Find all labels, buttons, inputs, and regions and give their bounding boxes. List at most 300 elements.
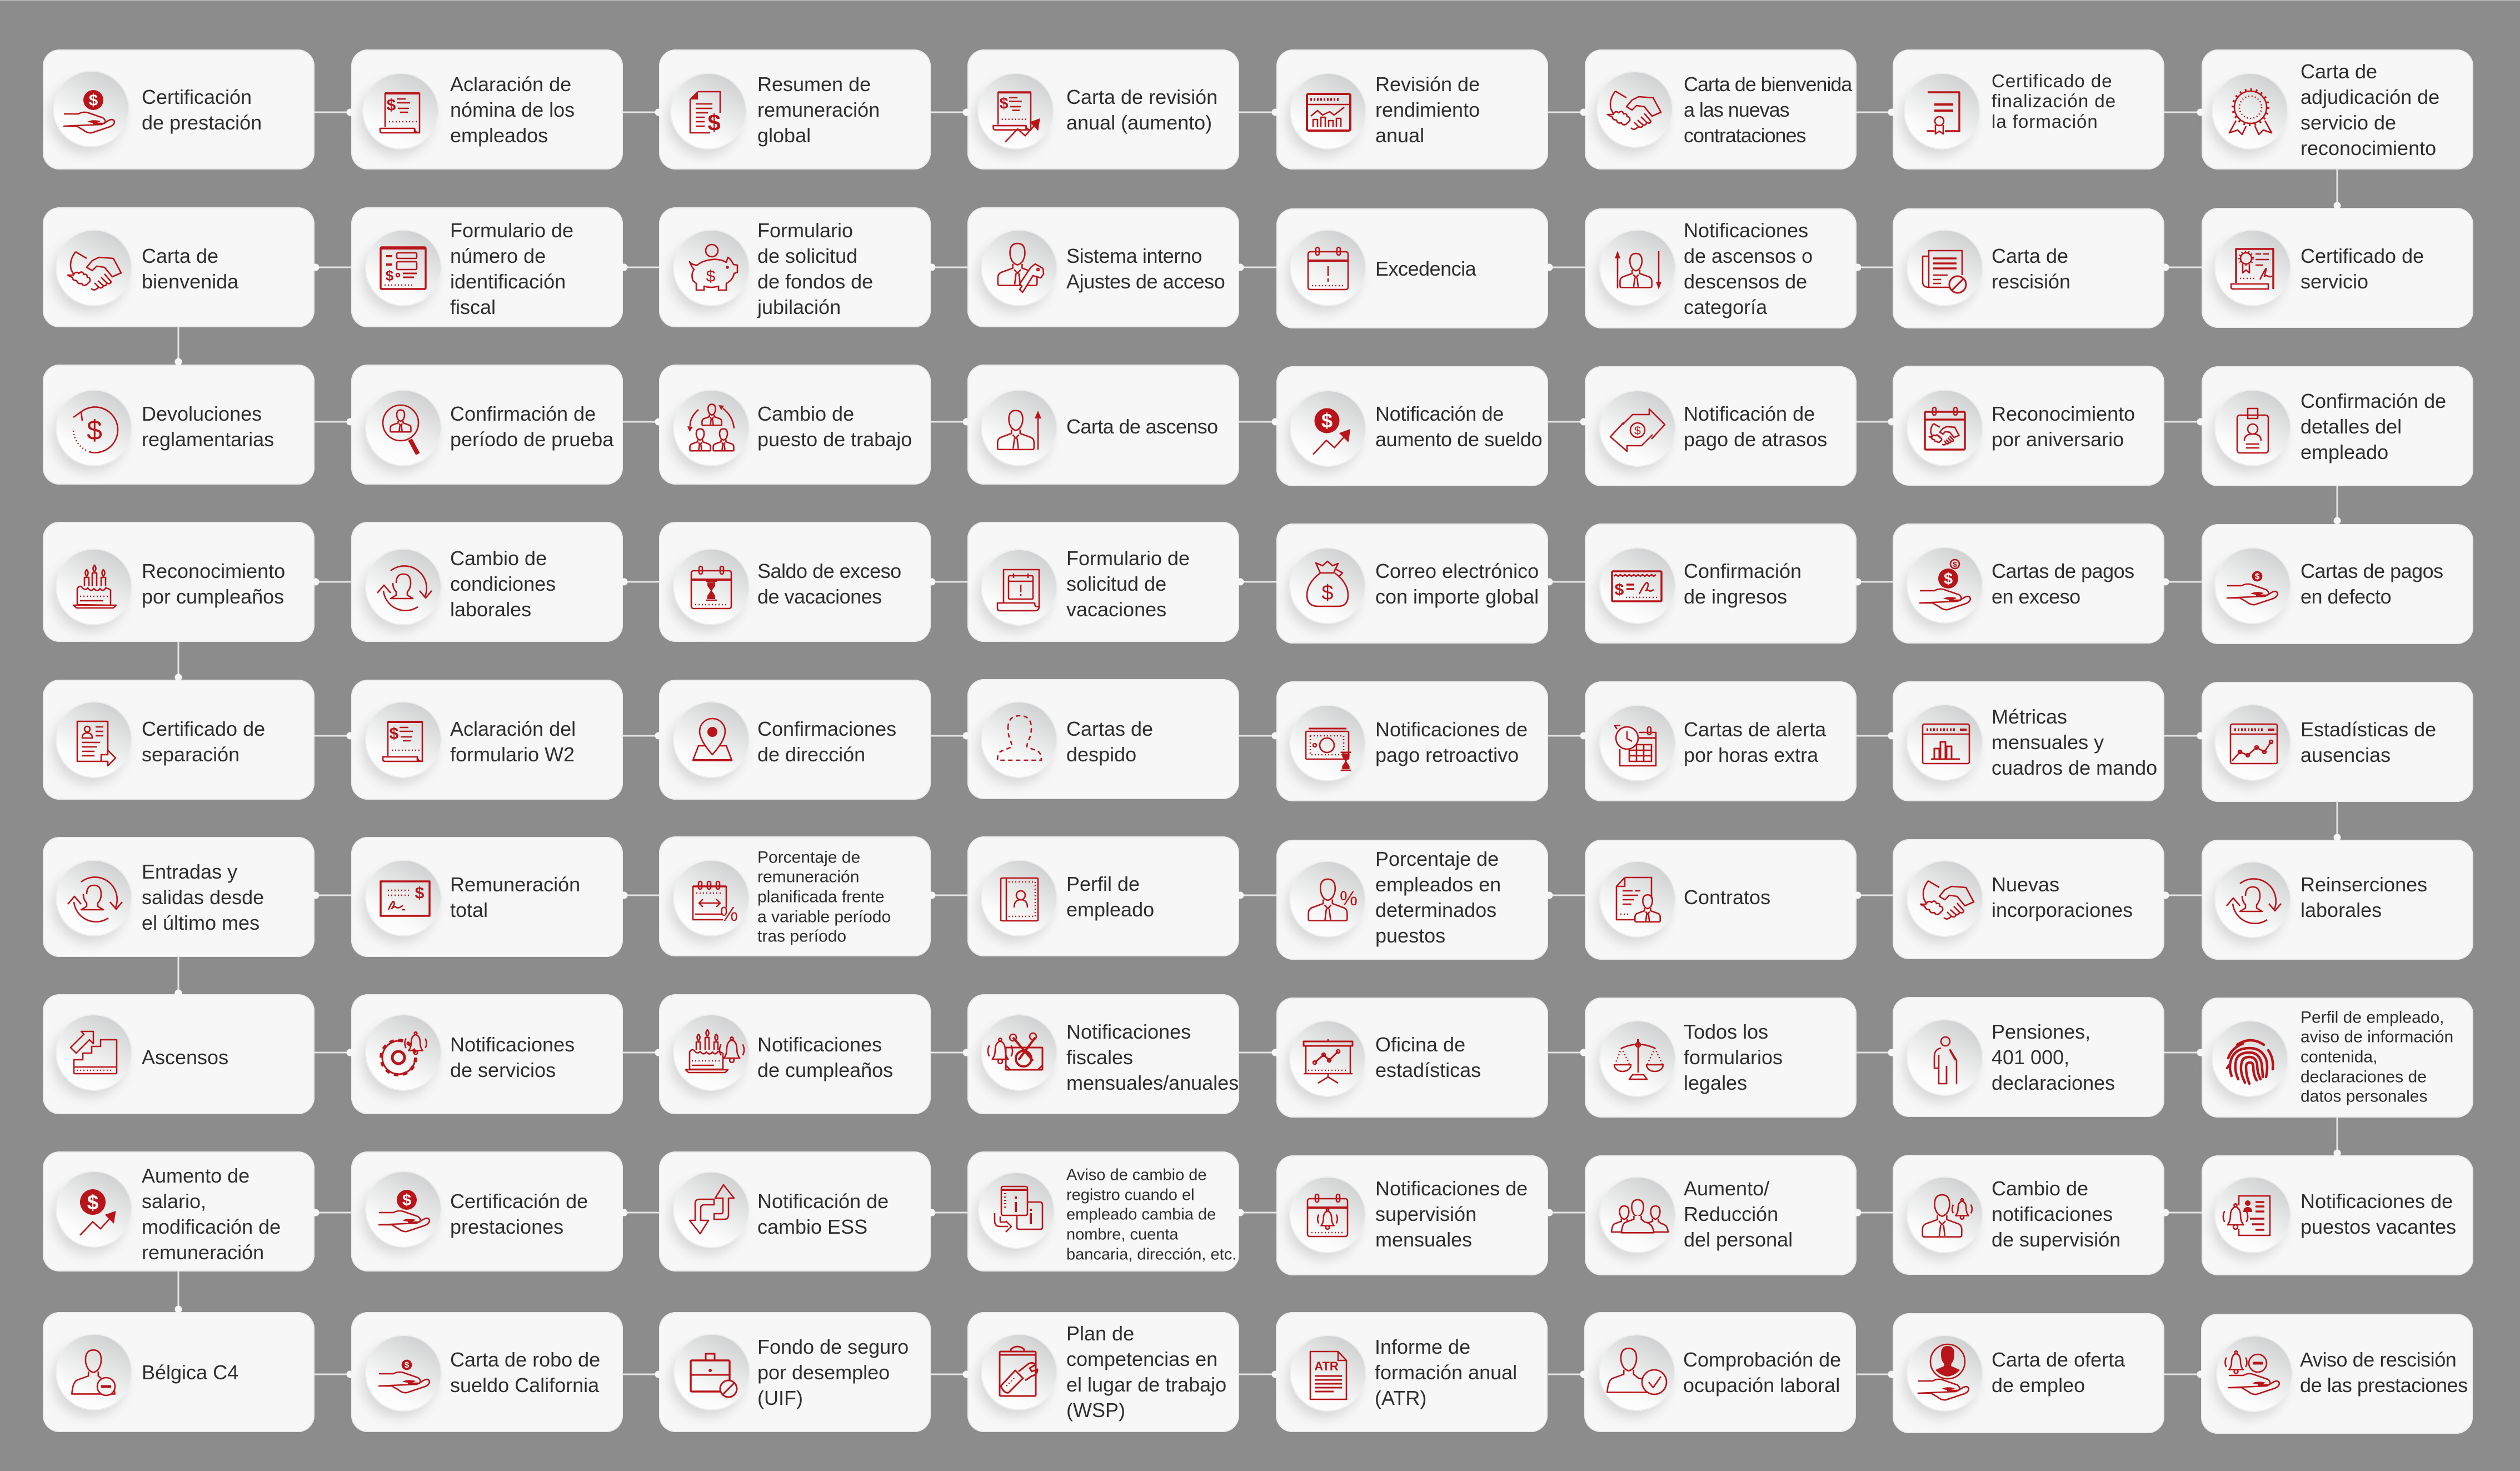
label: Reinserciones — [2301, 873, 2427, 896]
card: Cambio de condiciones laborales — [351, 522, 623, 642]
icon: ATR report: ATR — [1314, 1359, 1339, 1373]
label: Perfil de empleado, — [2301, 1008, 2444, 1026]
icon: calendar with percent — [674, 861, 748, 935]
card: Notificaciones de cumpleaños — [659, 994, 931, 1114]
label: detalles del — [2301, 415, 2402, 438]
icon: ID badge — [2215, 391, 2290, 465]
label: Estadísticas de — [2301, 718, 2436, 741]
label — [2301, 1008, 2453, 1107]
label: Reconocimiento — [142, 560, 285, 582]
label: Certificado de — [142, 717, 265, 740]
card: Carta de oferta de empleo — [1893, 1313, 2164, 1433]
card: Cartas de pagos en exceso — [1893, 523, 2164, 644]
label: Cartas de alerta — [1684, 718, 1826, 741]
label — [1066, 1019, 1239, 1096]
label: Formulario — [757, 219, 853, 242]
label: Nuevas — [1992, 873, 2059, 896]
label — [450, 219, 573, 318]
card: Resumen de remuneración — [659, 49, 931, 169]
label — [142, 559, 285, 610]
card: Formulario de solicitud de fondos — [659, 207, 931, 327]
label: ausencias — [2301, 744, 2391, 766]
label — [1992, 872, 2133, 923]
label — [450, 716, 576, 767]
card: Porcentaje de empleados — [1276, 840, 1548, 960]
label — [1375, 559, 1539, 610]
card: Notificación de cambio ESS — [659, 1151, 931, 1271]
label: reconocimiento — [2301, 137, 2436, 159]
label — [1992, 71, 2116, 132]
label: Ajustes de acceso — [1066, 270, 1225, 293]
label: supervisión — [1375, 1203, 1476, 1225]
icon: circular arrow with dollar — [57, 391, 131, 465]
card: Carta de ascenso — [967, 365, 1239, 485]
card: Bélgica C4 — [43, 1312, 315, 1432]
icon: hand with coins: $ — [1953, 560, 1957, 569]
card: Revisión de rendimiento anual — [1276, 49, 1548, 169]
label — [450, 546, 556, 622]
label: Perfil de — [1066, 872, 1140, 895]
label — [1683, 1347, 1841, 1398]
icon: banknote with hourglass — [1290, 706, 1365, 780]
label: fiscales — [1066, 1046, 1133, 1069]
card: Plan de competencias — [967, 1312, 1239, 1432]
label: Certificación — [142, 86, 252, 108]
icon: scales of justice — [1600, 1021, 1675, 1096]
icon: three people in cycle — [674, 391, 748, 465]
label: Carta de robo de — [450, 1348, 600, 1371]
label — [1992, 1176, 2120, 1253]
icon: hand with person in circle — [1908, 1336, 1982, 1410]
label — [142, 86, 262, 134]
label: ocupación laboral — [1683, 1374, 1840, 1397]
icon: certificate — [1905, 74, 1979, 148]
label: (ATR) — [1375, 1387, 1426, 1409]
icon: map pin — [674, 702, 748, 777]
label — [1375, 1176, 1528, 1253]
label: contrataciones — [1684, 124, 1805, 147]
label: Remuneración — [450, 873, 580, 896]
label: Sistema interno — [1066, 245, 1202, 267]
icon: rosette — [2213, 74, 2287, 148]
icon: person with bell — [1908, 1178, 1982, 1252]
icon: calendar with hourglass — [674, 550, 748, 624]
icon: document with exit arrow — [57, 702, 131, 777]
icon: handshake — [57, 231, 131, 305]
label — [450, 1032, 575, 1083]
label: Revisión de — [1375, 73, 1480, 96]
label: tras período — [757, 928, 846, 946]
card: Cartas de alerta por horas extra — [1585, 681, 1857, 801]
label: remuneración — [757, 868, 859, 886]
label: global — [757, 124, 811, 147]
label: salario, — [142, 1190, 206, 1213]
icon: coin with trend — [57, 1172, 131, 1246]
label: Aclaración de — [450, 73, 571, 96]
label: empleados en — [1375, 873, 1501, 896]
label: Cambio de — [1992, 1177, 2088, 1200]
label — [757, 402, 912, 451]
icon: contract with person — [1600, 862, 1675, 936]
icon: person with up and down arrows — [1600, 231, 1675, 305]
label — [1684, 1019, 1783, 1096]
label: laborales — [450, 598, 531, 621]
label: Cartas de pagos — [1992, 560, 2134, 582]
label: estadísticas — [1375, 1059, 1481, 1081]
icon: three people — [1600, 1178, 1675, 1252]
label: puestos — [1375, 924, 1445, 947]
icon: magnifier over person — [366, 391, 441, 465]
label: Entradas y — [142, 860, 237, 883]
label: Notificaciones — [757, 1033, 882, 1056]
label — [1992, 559, 2134, 610]
label: Formulario de — [450, 219, 573, 242]
icon: pay check — [1600, 548, 1675, 623]
icon: person with rotating arrows — [2215, 862, 2290, 937]
label — [1375, 717, 1528, 768]
card: Notificaciones de puestos vacantes — [2202, 1155, 2473, 1275]
label: determinados — [1375, 899, 1496, 921]
label: Contratos — [1684, 886, 1770, 909]
label — [757, 219, 873, 318]
label — [1066, 1321, 1226, 1423]
label: Resumen de — [757, 73, 871, 96]
label: legales — [1684, 1071, 1747, 1094]
label: Aclaración del — [450, 717, 576, 740]
icon: calendar with percent: % — [720, 902, 738, 925]
card: Carta de robo de sueldo California — [351, 1312, 623, 1432]
label: período de prueba — [450, 428, 613, 451]
label: puestos vacantes — [2301, 1215, 2456, 1238]
card: Entradas y salidas — [43, 837, 315, 957]
label — [1066, 871, 1154, 923]
card: Reconocimiento por aniversario — [1893, 366, 2164, 486]
label: Aumento/ — [1684, 1177, 1769, 1200]
label: el último mes — [142, 911, 260, 934]
label — [1684, 1176, 1793, 1253]
card: Notificación de pago de atrasos — [1585, 366, 1857, 486]
card: Confirmación de ingresos — [1585, 523, 1857, 644]
label: remuneración — [142, 1241, 264, 1264]
card: Certificado de finalización — [1893, 49, 2164, 169]
label — [1684, 717, 1826, 768]
label: competencias en — [1066, 1348, 1217, 1370]
label: mensuales y — [1992, 731, 2104, 754]
label: servicio de — [2301, 111, 2396, 134]
label: modificación de — [142, 1215, 281, 1238]
label: rendimiento — [1375, 98, 1480, 121]
label: Cartas de — [1066, 717, 1153, 740]
card: Carta de revisión anual — [967, 49, 1239, 169]
label: Fondo de seguro — [757, 1335, 909, 1358]
label: sueldo California — [450, 1374, 599, 1397]
card: Ascensos — [43, 994, 315, 1114]
icon: payslip — [363, 74, 438, 148]
label: Plan de — [1066, 1322, 1134, 1345]
label: condiciones — [450, 572, 556, 595]
label: Saldo de exceso — [757, 560, 901, 582]
icon: hand with coins — [1908, 548, 1982, 622]
label — [142, 402, 274, 451]
icon: dashed person — [982, 702, 1056, 777]
icon: hand with small coin — [2215, 548, 2290, 623]
label: nombre, cuenta — [1066, 1226, 1179, 1244]
card: Contratos — [1585, 840, 1857, 960]
label: declaraciones — [1992, 1071, 2115, 1094]
label: Porcentaje de — [1375, 847, 1499, 870]
icon: calendar with handshake — [1908, 391, 1982, 465]
card: Fondo de seguro por desempleo — [659, 1312, 931, 1432]
label: Excedencia — [1375, 257, 1476, 280]
label: adjudicación de — [2301, 86, 2439, 108]
icon: briefcase with prohibition — [675, 1335, 749, 1409]
icon: line chart window — [2215, 705, 2290, 780]
label: nómina de los — [450, 98, 575, 121]
label: empleado — [1066, 898, 1154, 921]
label: de supervisión — [1992, 1228, 2120, 1251]
card: Excedencia — [1276, 208, 1548, 328]
label — [142, 716, 265, 767]
label: bienvenida — [142, 270, 238, 293]
card: Comprobación de ocupación laboral — [1584, 1312, 1856, 1432]
label: Pensiones, — [1992, 1020, 2090, 1043]
card: Saldo de exceso de vacaciones — [659, 522, 931, 642]
icon: bar chart window — [1908, 705, 1982, 780]
icon: payslip with trend arrow — [979, 74, 1053, 148]
icon: person with percent: % — [1340, 887, 1358, 910]
label: reglamentarias — [142, 428, 274, 451]
label — [142, 1163, 281, 1265]
card: Perfil de empleado — [967, 836, 1239, 956]
label: despido — [1066, 743, 1136, 766]
label: con importe global — [1375, 585, 1539, 608]
label: Notificaciones — [1684, 219, 1808, 242]
icon: exchange arrows with dollar: $ — [1634, 425, 1641, 437]
icon: piggy bank: $ — [706, 267, 716, 286]
label: Notificaciones de — [1375, 1177, 1528, 1200]
icon: handshake — [1908, 861, 1982, 936]
label — [757, 1189, 889, 1240]
icon: person with rotating arrows — [57, 861, 131, 935]
card: Confirmación de detalles del empleado — [2202, 366, 2473, 486]
label — [450, 1347, 600, 1398]
card: Notificaciones fiscales — [967, 994, 1239, 1114]
label — [1375, 402, 1542, 451]
label: Confirmación de — [450, 402, 596, 425]
card: Cambio de puesto de trabajo — [659, 365, 931, 485]
card: Remuneración total — [351, 837, 623, 957]
label: el lugar de trabajo — [1066, 1373, 1226, 1396]
label: categoría — [1684, 296, 1767, 318]
label: identificación — [450, 270, 566, 293]
label — [1992, 401, 2135, 452]
label: la formación — [1992, 111, 2098, 132]
label: Carta de — [142, 245, 218, 267]
label: formación anual — [1375, 1361, 1517, 1384]
icon: payslip — [366, 702, 441, 777]
card: Reconocimiento por cumpleaños — [43, 522, 315, 642]
label: a las nuevas — [1684, 98, 1789, 121]
label: de cumpleaños — [757, 1059, 893, 1081]
icon: hand with small coin — [366, 1336, 441, 1410]
card: Certificado de separación — [43, 680, 315, 800]
label: en defecto — [2301, 585, 2391, 608]
label: por cumpleaños — [142, 585, 284, 608]
label: Aviso de cambio de — [1066, 1166, 1207, 1184]
label — [1066, 546, 1190, 622]
card: Aumento de salario — [43, 1151, 315, 1271]
icon: clock and calendar grid — [1600, 706, 1675, 780]
label: a variable período — [757, 907, 891, 926]
label: Carta de bienvenida — [1684, 73, 1852, 96]
label: (UIF) — [757, 1387, 803, 1409]
label: Notificaciones de — [2301, 1190, 2453, 1213]
label: de vacaciones — [757, 585, 882, 608]
label: mensuales/anuales — [1066, 1071, 1239, 1094]
label: rescisión — [1992, 270, 2070, 293]
label: puesto de trabajo — [757, 428, 912, 451]
label: solicitud de — [1066, 572, 1166, 595]
icon: stairs with arrow — [57, 1015, 131, 1090]
label: salidas desde — [142, 886, 264, 909]
icon: person with rotating arrows — [366, 550, 441, 624]
card: Aumento/Reducción del personal — [1585, 1155, 1857, 1275]
icon: circular arrow with dollar: $ — [87, 415, 102, 446]
icon: calendar with bell — [1290, 1178, 1365, 1252]
label: Carta de — [1992, 245, 2068, 267]
card: Informe de formación anual — [1276, 1312, 1548, 1432]
label: Reconocimiento — [1992, 402, 2135, 425]
label — [1992, 1019, 2115, 1096]
icon: paper with prohibition sign — [1908, 231, 1982, 305]
label: Correo electrónico — [1375, 560, 1539, 582]
icon: document with bell — [2215, 1178, 2290, 1252]
label: Certificado de — [2301, 245, 2424, 267]
label: de servicios — [450, 1059, 556, 1081]
card: Reinserciones laborales — [2202, 840, 2473, 960]
icon: coin with trend — [1291, 391, 1365, 466]
icon: cheque with dollar: $ — [415, 884, 425, 902]
icon: clipboard with wrench and hand — [982, 1335, 1056, 1409]
label: aviso de información — [2301, 1028, 2453, 1046]
card: Pensiones, 401 000, declaraciones — [1893, 997, 2164, 1117]
card: Carta de rescisión — [1893, 208, 2164, 328]
label — [450, 872, 580, 923]
label: número de — [450, 245, 546, 267]
label: Notificaciones — [1066, 1020, 1191, 1043]
label: Cambio de — [450, 547, 547, 570]
label: por aniversario — [1992, 428, 2124, 451]
label: en exceso — [1992, 585, 2080, 608]
icon: two info cards with arrow — [979, 1173, 1054, 1248]
label: total — [450, 899, 488, 921]
label: Formulario de — [1066, 547, 1190, 570]
label: Carta de ascenso — [1066, 415, 1218, 438]
icon: person and key — [982, 231, 1056, 305]
icon: money bag: $ — [1321, 581, 1334, 605]
label: fiscal — [450, 296, 496, 318]
label: Reducción — [1684, 1203, 1778, 1225]
card: Perfil de empleado, aviso de información contenida — [2202, 998, 2473, 1118]
card: Formulario de solicitud de vacaciones — [967, 522, 1239, 642]
label — [757, 716, 896, 767]
icon: two-way arrows — [674, 1173, 748, 1247]
card: Sistema interno Ajustes de acceso — [967, 207, 1239, 327]
card: Formulario de número de identificación fiscal — [351, 207, 623, 327]
label — [1375, 1334, 1517, 1411]
label: Bélgica C4 — [142, 1361, 238, 1384]
label: de empleo — [1992, 1374, 2085, 1397]
icon: calendar with exclamation — [1291, 231, 1365, 305]
card: Aclaración del formulario W2 — [351, 680, 623, 800]
label: cuadros de mando — [1992, 756, 2157, 779]
icon: cheque with dollar — [366, 861, 441, 935]
label: Porcentaje de — [757, 848, 860, 866]
label: Carta de oferta — [1992, 1348, 2125, 1371]
icon: gear and bell — [366, 1015, 441, 1090]
label: Notificaciones — [450, 1033, 575, 1056]
label: Confirmaciones — [757, 717, 896, 740]
label — [2301, 872, 2427, 923]
label — [757, 1032, 893, 1083]
icon: handshake — [1598, 72, 1672, 147]
label: anual (aumento) — [1066, 111, 1212, 134]
label: registro cuando el — [1066, 1186, 1195, 1204]
card: Aviso de cambio de registro — [967, 1151, 1239, 1271]
icon: performance chart window — [1291, 74, 1365, 148]
card: Nuevas incorporaciones — [1893, 839, 2164, 959]
icon: person with up arrow — [982, 391, 1056, 465]
card: Notificaciones de servicios — [351, 994, 623, 1114]
label: jubilación — [757, 296, 841, 318]
card: Todos los formularios legales — [1585, 998, 1857, 1118]
label: empleado cambia de — [1066, 1206, 1216, 1224]
label — [450, 1189, 588, 1240]
label: Notificación de — [757, 1190, 889, 1213]
label: Oficina de — [1375, 1033, 1465, 1056]
label: Comprobación de — [1683, 1348, 1841, 1371]
label: Certificación de — [450, 1190, 588, 1213]
label: Confirmación — [1684, 560, 1802, 582]
label: de fondos de — [757, 270, 873, 293]
label — [1066, 86, 1217, 134]
label: planificada frente — [757, 888, 885, 906]
icon: profile book — [982, 861, 1056, 935]
card: Confirmaciones de dirección — [659, 680, 931, 800]
icon: elderly person with cane — [1908, 1020, 1982, 1095]
icon: service certificate — [2215, 231, 2290, 305]
label: remuneración — [757, 98, 880, 121]
label: incorporaciones — [1992, 899, 2133, 921]
label: Notificación de — [1375, 402, 1504, 425]
icon: cake and bell — [674, 1015, 748, 1090]
label — [1066, 1166, 1236, 1265]
icon: ATR report — [1291, 1336, 1365, 1410]
card: Cambio de notificaciones de supervisión — [1893, 1155, 2164, 1275]
label: contenida, — [2301, 1048, 2377, 1066]
card: Aviso de rescisión de las prestaciones — [2201, 1314, 2473, 1434]
label: Notificaciones de — [1375, 718, 1528, 741]
icon: tax form: $ — [386, 267, 394, 284]
icon: hand and dollar coin — [54, 72, 128, 146]
label: Aumento de — [142, 1164, 249, 1187]
label — [1684, 559, 1802, 610]
label: Ascensos — [142, 1046, 228, 1069]
card: Devoluciones reglamentarias — [43, 365, 315, 485]
label: Carta de — [2301, 60, 2377, 83]
label — [2301, 245, 2424, 293]
label: Carta de revisión — [1066, 86, 1217, 108]
